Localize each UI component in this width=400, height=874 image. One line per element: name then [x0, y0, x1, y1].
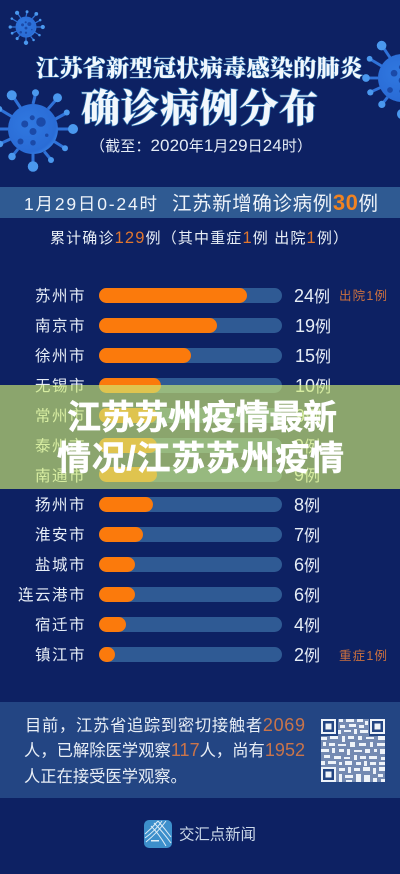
text block: close contact figures [24, 715, 305, 786]
row: 淮安市 [35, 525, 320, 545]
row: 宿迁市: 宿迁市 [35, 616, 86, 634]
row: 徐州市: 15例 [295, 346, 331, 366]
brand name: 交汇点新闻 [179, 826, 256, 844]
row: 无锡市: 10例 [295, 376, 331, 396]
row: 宿迁市: 4例 [294, 615, 320, 635]
row: 泰州市: 泰州市 [35, 437, 86, 455]
subtitle: date: （截至：2020年1月29日24时） [90, 136, 312, 155]
bar chart: cases by city [18, 286, 387, 665]
row: 扬州市: 扬州市 [35, 496, 86, 514]
title: 江苏省新型冠状病毒感染的肺炎 [36, 55, 365, 81]
row: 无锡市 [35, 376, 331, 396]
icon: virus right [362, 40, 400, 119]
row: 苏州市 [35, 286, 387, 306]
row: 盐城市: 盐城市 [35, 556, 86, 574]
icon: app logo [144, 820, 172, 848]
icon: virus top left [9, 10, 45, 45]
row: 泰州市 [35, 436, 320, 456]
row: 宿迁市 [35, 615, 320, 635]
row: 泰州市: 9例 [294, 436, 320, 456]
band: daily new cases: 江苏新增确诊病例30例 [172, 190, 378, 215]
row: 常州市 [35, 406, 321, 426]
icon: virus left [0, 89, 78, 172]
overlay heading [57, 399, 344, 478]
overlay heading: 江苏苏州疫情最新 [67, 399, 337, 437]
row: 徐州市: 徐州市 [35, 347, 86, 365]
band: daily new cases [0, 187, 400, 218]
row: 无锡市: 无锡市 [35, 377, 86, 395]
overlay heading: 情况/江苏苏州疫情 [57, 440, 344, 478]
text block: close contact figures: 人，已解除医学观察117人，尚有1952 [24, 740, 305, 760]
row: 南通市: 南通市 [35, 467, 86, 485]
row: 连云港市: 6例 [294, 585, 320, 605]
row: 南京市: 19例 [295, 316, 331, 336]
row: 常州市: 常州市 [35, 407, 86, 425]
row: 镇江市 [35, 645, 387, 665]
logo: 交汇点新闻 [144, 820, 256, 848]
row: 扬州市 [35, 495, 320, 515]
overlay banner [0, 385, 400, 489]
row: 连云港市: 连云港市 [18, 586, 86, 604]
cumulative summary: 累计确诊129例（其中重症1例 出院1例） [50, 229, 348, 247]
row: 苏州市: 出院1例 [339, 289, 387, 303]
row: 苏州市: 24例 [294, 286, 330, 306]
title: 确诊病例分布 [81, 87, 318, 131]
row: 镇江市: 镇江市 [35, 646, 86, 664]
row: 盐城市 [35, 555, 320, 575]
row: 南京市 [35, 316, 331, 336]
title [36, 55, 365, 131]
row: 淮安市: 7例 [294, 525, 320, 545]
row: 南通市: 9例 [294, 465, 320, 485]
row: 连云港市 [18, 585, 320, 605]
row: 苏州市: 苏州市 [35, 287, 86, 305]
row: 镇江市: 重症1例 [339, 648, 387, 663]
band: daily new cases: 1月29日0-24时 [24, 194, 157, 214]
text block: close contact figures: 目前，江苏省追踪到密切接触者2069 [25, 715, 305, 735]
row: 徐州市 [35, 346, 331, 366]
panel: close contacts [0, 702, 400, 798]
row: 镇江市: 2例 [294, 645, 320, 665]
row: 淮安市: 淮安市 [35, 526, 86, 544]
row: 南京市: 南京市 [35, 317, 86, 335]
row: 扬州市: 8例 [294, 495, 320, 515]
row: 南通市 [35, 465, 320, 485]
row: 盐城市: 6例 [294, 555, 320, 575]
text block: close contact figures: 人正在接受医学观察。 [24, 768, 187, 786]
row: 常州市: 9例 [295, 406, 321, 426]
QR code [321, 719, 385, 782]
